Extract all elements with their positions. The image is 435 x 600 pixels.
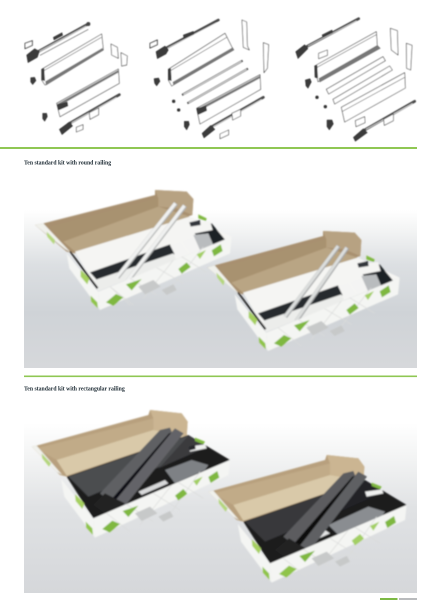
heading: round railing: Ten standard kit with round railing	[24, 160, 111, 166]
rectangular rails	[326, 57, 392, 104]
side wall	[61, 479, 95, 538]
front wall	[93, 460, 230, 538]
lid	[32, 410, 188, 477]
side wall	[67, 253, 100, 310]
divider line	[24, 376, 417, 377]
bottom runner	[353, 101, 415, 141]
bottom runner	[202, 97, 263, 138]
front wall	[270, 505, 407, 583]
photo background	[24, 423, 417, 593]
clip plate	[25, 41, 32, 49]
round rail dots	[172, 100, 180, 112]
divider line	[0, 147, 417, 149]
lid side flap	[207, 265, 239, 293]
box: rectangular railing, small	[208, 455, 407, 583]
round rails	[182, 61, 248, 103]
clip plate	[150, 40, 157, 48]
top runner	[296, 19, 359, 59]
lid	[35, 190, 193, 253]
front wall	[98, 214, 232, 310]
rectangular rails	[93, 428, 184, 513]
clip plate	[220, 130, 229, 139]
front wall	[266, 255, 400, 351]
clip plate	[355, 117, 365, 127]
photo background	[24, 210, 417, 368]
diagram: drawer kit exploded view, standard sides	[25, 22, 127, 135]
clip plate	[76, 125, 83, 132]
clip plate	[319, 50, 327, 59]
diagram: drawer kit exploded view, rectangular railing	[296, 19, 415, 141]
side wall	[238, 524, 272, 583]
clip	[31, 77, 36, 85]
lid	[208, 455, 365, 522]
rail dots	[315, 96, 327, 108]
contents	[237, 258, 400, 332]
photo panel: rectangular railing kits	[24, 410, 417, 593]
rear brackets	[111, 44, 127, 66]
bottom runner	[59, 95, 119, 135]
lid side flap	[35, 223, 71, 252]
contents	[69, 217, 232, 291]
contents	[67, 435, 230, 518]
photo panel: round railing kits	[24, 190, 417, 368]
top runner	[27, 22, 90, 63]
upper side panel	[168, 33, 234, 86]
clips	[305, 79, 333, 130]
rear brackets	[390, 28, 412, 70]
box: round railing, small	[207, 231, 400, 351]
box: round railing, large	[35, 190, 232, 310]
clip	[43, 113, 47, 121]
clips	[154, 78, 189, 130]
rectangular rails	[275, 471, 367, 560]
lower side panel	[57, 69, 119, 117]
side wall	[235, 294, 268, 351]
lid	[207, 231, 361, 294]
lower side panel	[197, 75, 261, 124]
lid side flap	[32, 446, 62, 475]
lid side flap	[208, 491, 239, 520]
round rails	[285, 246, 347, 321]
box: rectangular railing, large	[32, 410, 230, 538]
footer page tabs	[380, 598, 417, 600]
diagram: drawer kit exploded view, round railing	[150, 20, 269, 139]
round rails	[117, 203, 185, 281]
contents	[243, 480, 407, 563]
upper side panel	[42, 34, 103, 85]
top runner	[156, 20, 218, 59]
lower side panel	[341, 73, 405, 122]
upper side panel	[315, 32, 381, 82]
heading: rectangular railing: Ten standard kit with rectangular railing	[24, 386, 125, 392]
rear brackets	[242, 20, 269, 73]
